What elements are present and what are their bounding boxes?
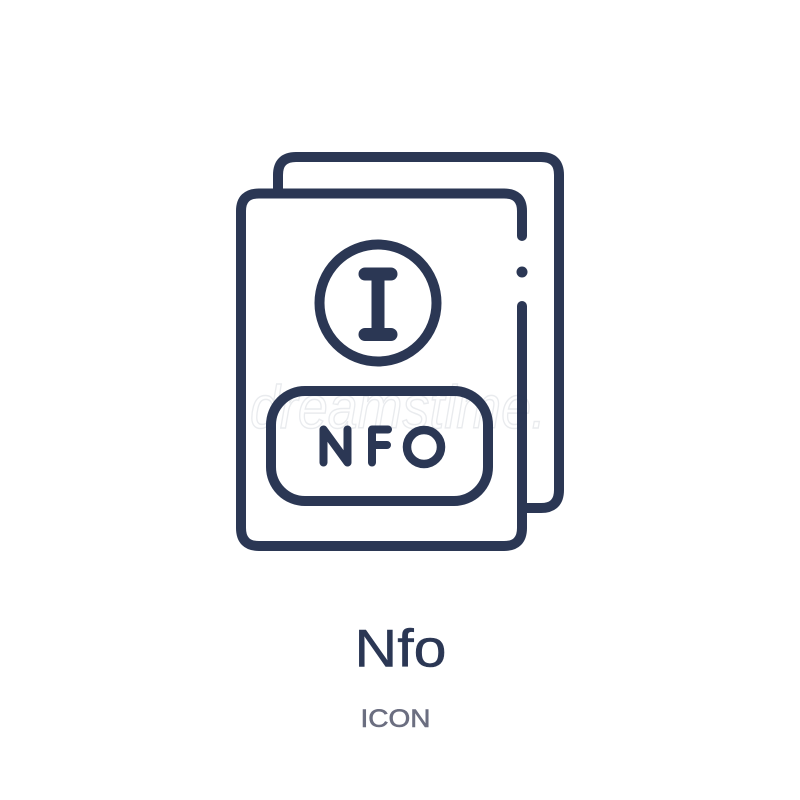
subtitle: ICON: [360, 705, 430, 733]
NFO label badge: [271, 391, 488, 501]
icon: nfo file documents: [241, 157, 559, 546]
info circle with letter I: [320, 244, 436, 362]
back page outline: [278, 157, 559, 508]
front page edge dot: [516, 266, 528, 278]
title: Nfo: [354, 620, 446, 678]
front page outline: [241, 194, 522, 546]
watermark: dreamstime.: [250, 374, 546, 441]
